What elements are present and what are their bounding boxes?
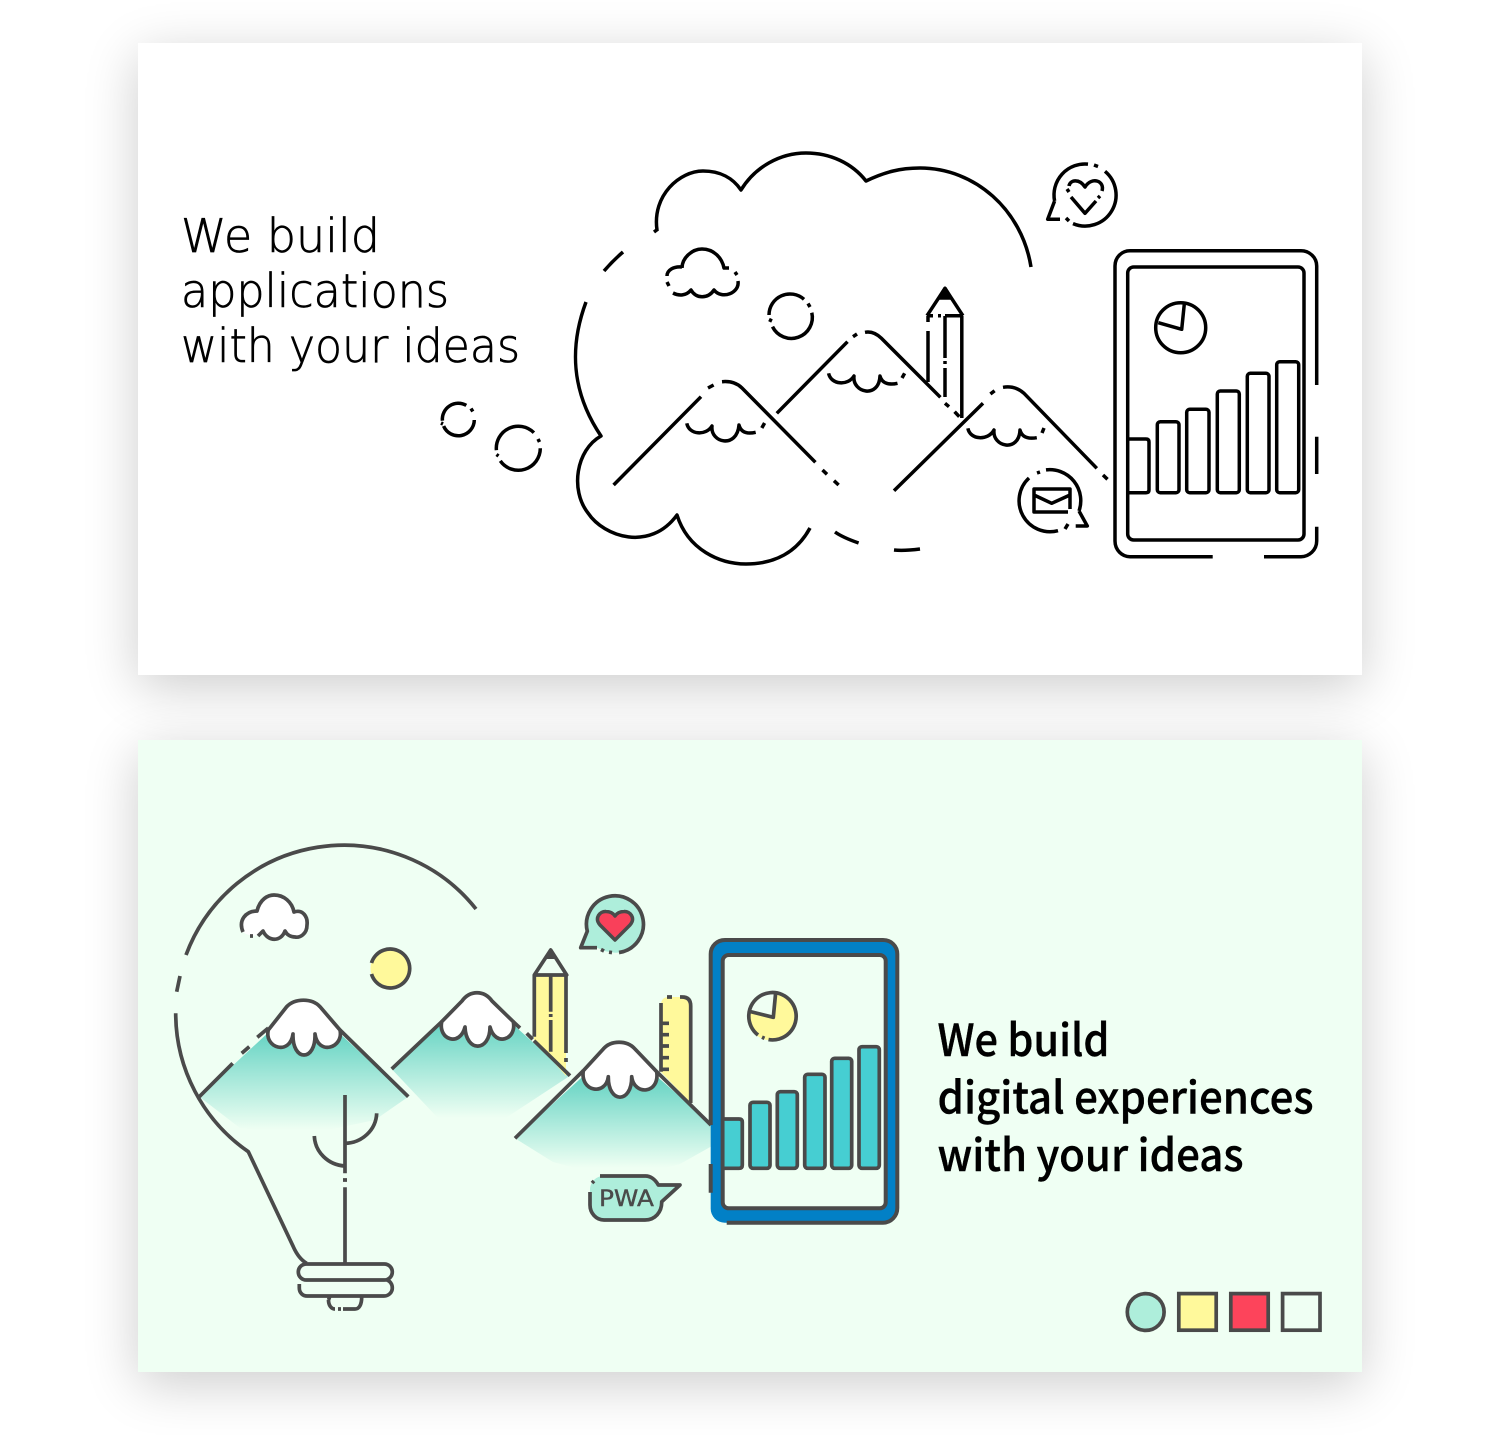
mountain 3 outline — [894, 387, 1108, 491]
tablet body — [1115, 251, 1317, 557]
tablet body — [711, 940, 897, 1223]
mountain 1 outline — [614, 382, 839, 485]
icon: PWA speech bubble — [590, 1176, 680, 1220]
mountain 3 snow — [583, 1042, 657, 1097]
cloud coloured — [241, 895, 307, 939]
lightbulb outline — [176, 845, 476, 1309]
tree in bulb — [343, 1095, 347, 1264]
heading: top panel: We build — [181, 209, 380, 263]
tablet outline — [1115, 251, 1317, 557]
pencil coloured — [534, 950, 570, 1076]
pie chart — [1156, 303, 1206, 353]
mountain 2 snow — [441, 993, 514, 1046]
mountain 2 coloured — [392, 992, 570, 1135]
tablet coloured — [711, 940, 897, 1223]
sun outline — [769, 294, 812, 338]
heading: top panel — [181, 209, 520, 373]
icon: heart bubble coloured — [581, 896, 643, 953]
large thought cloud outline — [575, 153, 1031, 564]
icon: heart speech bubble — [1048, 164, 1116, 226]
heading: bottom panel: We build — [938, 1005, 1110, 1069]
pencil outline — [927, 288, 963, 418]
panel: mint card background — [138, 740, 1362, 1372]
mountain 1 coloured — [199, 1000, 408, 1135]
heading: bottom panel — [938, 1005, 1314, 1184]
tablet screen — [1128, 267, 1304, 540]
mountain 1 snow — [268, 1000, 340, 1055]
heading: bottom panel: with your ideas — [938, 1120, 1244, 1184]
mountain 3 coloured — [515, 1042, 712, 1180]
heading: bottom panel: digital experiences — [938, 1062, 1314, 1126]
heading: top panel: with your ideas — [181, 319, 520, 373]
small cloud — [667, 249, 738, 297]
ruler — [661, 997, 691, 1103]
bar chart — [723, 1047, 879, 1168]
sun coloured — [370, 949, 410, 988]
PWA label: PWA — [599, 1187, 654, 1212]
heading: top panel: applications — [181, 264, 449, 318]
icon: mail speech bubble — [1019, 470, 1087, 532]
tablet screen — [723, 955, 886, 1208]
pie chart — [747, 993, 796, 1040]
thought bubbles — [441, 403, 540, 470]
panel: white card background — [138, 43, 1362, 675]
mountain 2 outline — [777, 332, 959, 417]
legend: colour swatches — [1127, 1294, 1320, 1330]
bar chart — [1128, 362, 1299, 493]
